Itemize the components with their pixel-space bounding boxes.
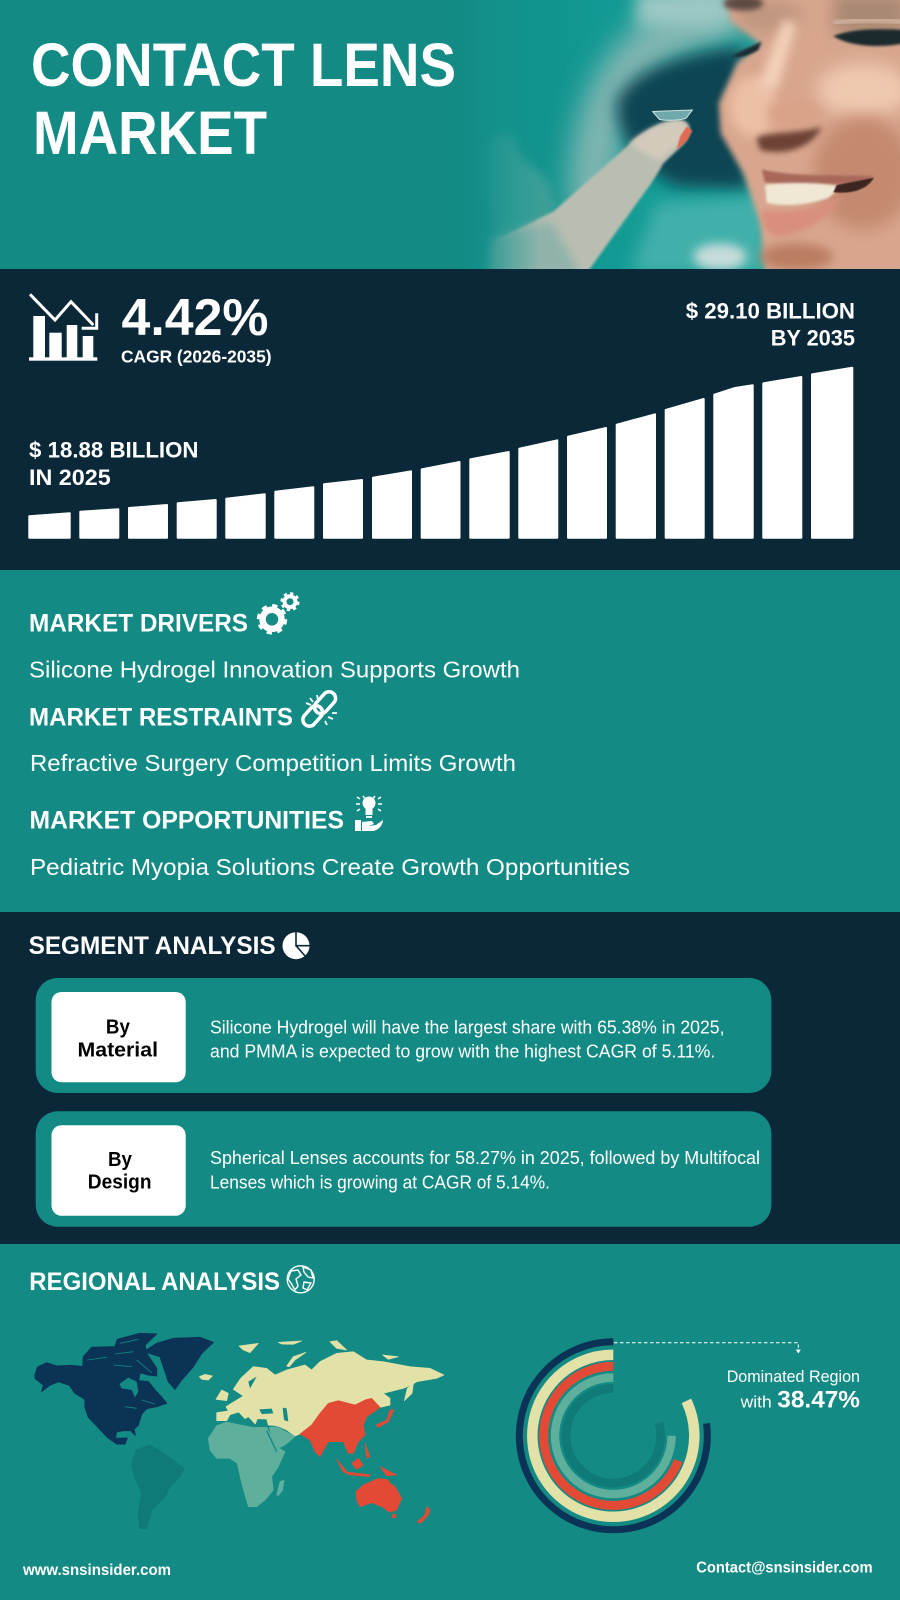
heading: market drivers: MARKET DRIVERS — [29, 609, 248, 637]
region: asia pacific (dominant) — [300, 1398, 430, 1523]
title — [31, 31, 456, 167]
label: 2035 value: $ 29.10 BILLION — [686, 298, 855, 323]
map: world regions — [35, 1333, 444, 1528]
chart: radial arcs — [519, 1342, 707, 1530]
region: north america — [35, 1333, 213, 1444]
icon: bar chart with trend arrow — [29, 294, 97, 361]
footer: contact: Contact@snsinsider.com — [696, 1560, 873, 1577]
label: 2025 value: IN 2025 — [29, 465, 111, 490]
heading: segment analysis: SEGMENT ANALYSIS — [29, 932, 276, 960]
photo: woman holding contact lens on fingertip — [470, 0, 900, 273]
badge: by material: Material — [78, 1039, 158, 1062]
label: 2025 value — [29, 438, 198, 490]
text: driver: Silicone Hydrogel Innovation Supports Growth — [29, 656, 520, 682]
badge: by material: By — [106, 1015, 130, 1038]
text: opportunity: Pediatric Myopia Solutions Create Growth Opportunities — [30, 854, 630, 880]
heading: market restraints: MARKET RESTRAINTS — [29, 703, 293, 731]
label: 2035 value — [686, 298, 855, 350]
badge: by material — [52, 992, 186, 1082]
title: CONTACT LENS — [31, 31, 456, 99]
icon: pie chart — [282, 930, 311, 959]
region: africa and middle east — [208, 1422, 295, 1507]
icon: lightbulb in hand — [355, 796, 383, 831]
footer: website: www.snsinsider.com — [22, 1562, 171, 1579]
icon: globe — [287, 1266, 314, 1293]
panel: market size — [0, 269, 900, 570]
heading: market opportunities: MARKET OPPORTUNITIES — [30, 807, 344, 835]
card: by material — [36, 978, 771, 1093]
badge: by design — [52, 1125, 186, 1216]
CAGR value: CAGR (2026-2035) — [121, 347, 272, 367]
text: design description: Spherical Lenses accounts for 58.27% in 2025, followed by Multifocal — [210, 1147, 760, 1168]
arrow: dashed leader — [614, 1343, 801, 1354]
callout: dominated region: Dominated Region — [727, 1368, 860, 1386]
title: MARKET — [33, 99, 267, 167]
region: south america — [132, 1445, 184, 1528]
heading: regional analysis: REGIONAL ANALYSIS — [29, 1268, 280, 1296]
CAGR value: 4.42% — [122, 289, 268, 347]
label: 2025 value: $ 18.88 BILLION — [29, 438, 198, 463]
bar chart — [29, 368, 852, 538]
badge: by design: Design — [88, 1171, 152, 1194]
badge: by design: By — [108, 1148, 133, 1171]
card: by design — [36, 1111, 771, 1227]
text: material description: Silicone Hydrogel will have the largest share with 65.38% in 2025, — [210, 1016, 724, 1037]
label: 2035 value: BY 2035 — [771, 325, 855, 350]
panel: segment analysis — [0, 912, 900, 1244]
panel: header — [0, 0, 900, 273]
callout: dominated region — [727, 1368, 860, 1414]
callout: dominated region: 38.47% — [777, 1387, 860, 1414]
text: design description: Lenses which is growing at CAGR of 5.14%. — [210, 1171, 550, 1192]
panel: market dynamics — [0, 570, 900, 912]
panel: regional analysis — [0, 1244, 900, 1600]
icon: broken link — [300, 689, 338, 729]
text: design description — [210, 1147, 760, 1192]
text: restraint: Refractive Surgery Competition Limits Growth — [30, 750, 516, 776]
text: material description — [210, 1016, 724, 1062]
text: material description: and PMMA is expected to grow with the highest CAGR of 5.11%. — [210, 1041, 715, 1062]
callout: dominated region: with — [740, 1394, 772, 1412]
region: europe and north asia — [199, 1341, 444, 1436]
icon: gears — [258, 593, 298, 633]
